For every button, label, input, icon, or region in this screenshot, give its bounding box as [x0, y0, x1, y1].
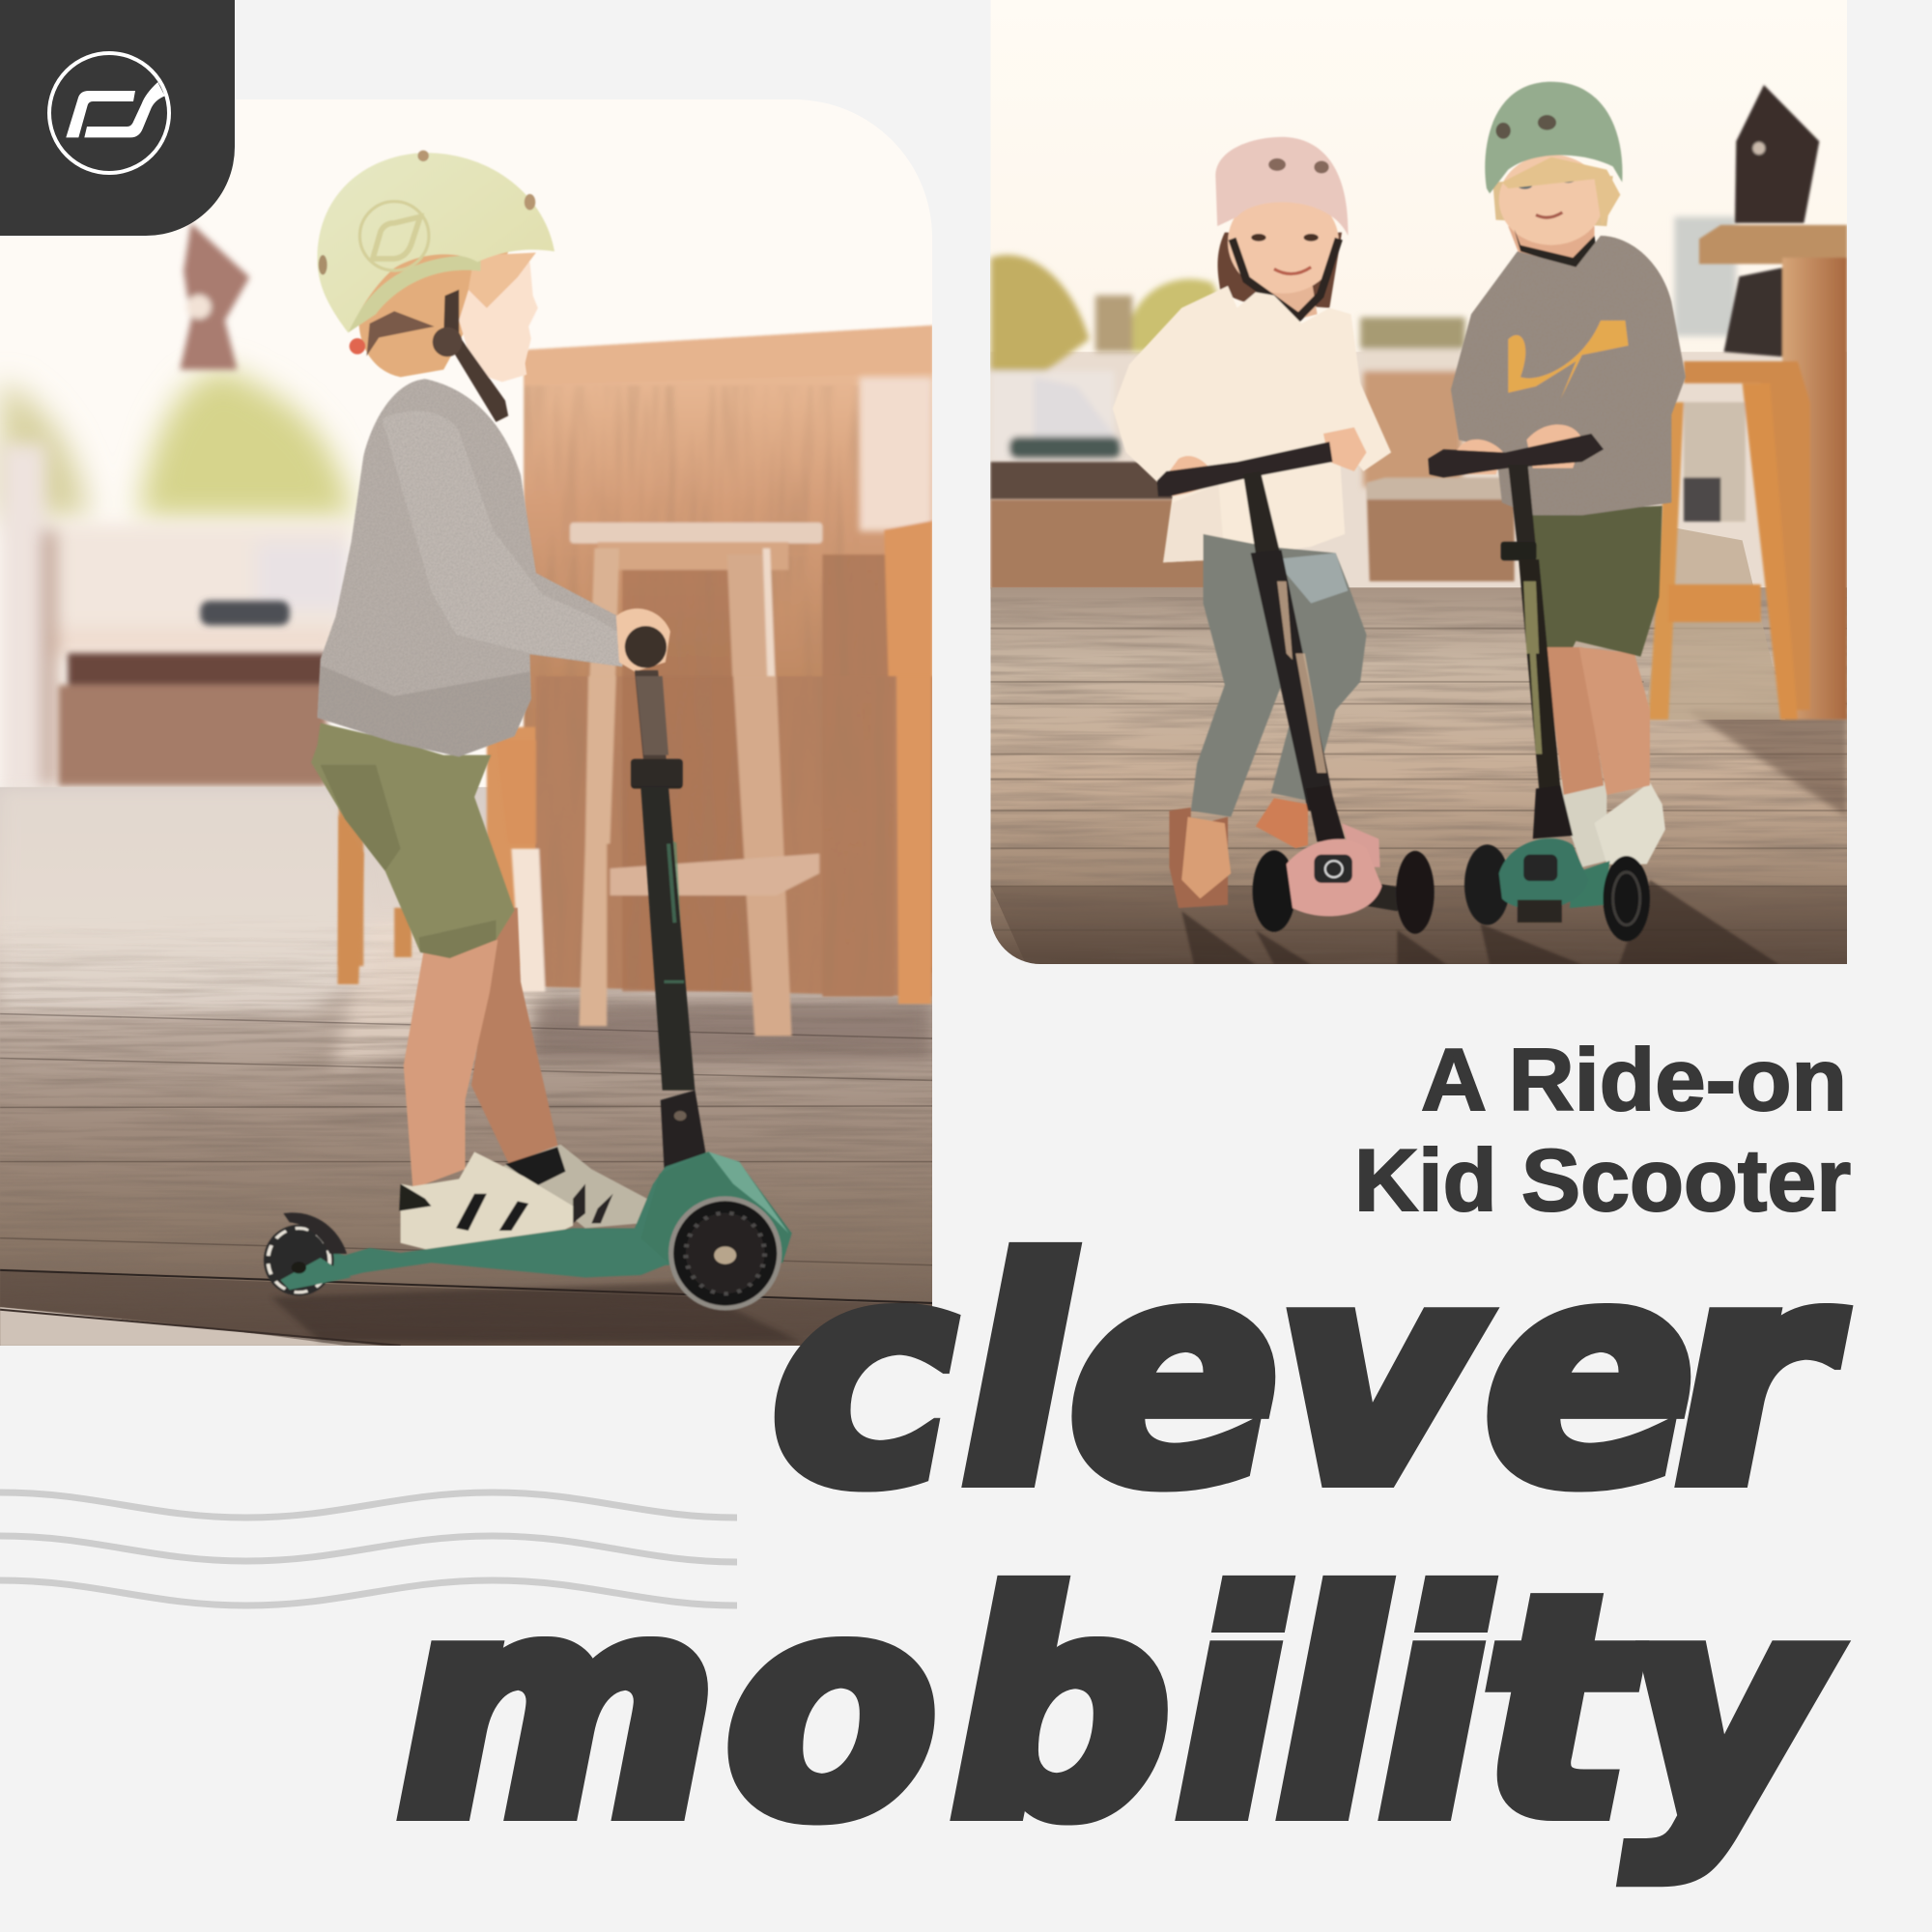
headline	[398, 1198, 1843, 1887]
subtitle: Kid Scooter	[1354, 1132, 1851, 1230]
subtitle: A Ride-on	[1421, 1032, 1847, 1129]
subtitle	[1354, 1032, 1851, 1230]
headline: mobility	[398, 1531, 1836, 1887]
boy figure and scooter	[264, 151, 792, 1311]
headline: clever	[773, 1198, 1843, 1553]
photo: boy riding scooter in profile	[0, 99, 933, 1349]
icon: brand roundel	[49, 53, 169, 173]
photo: girl and boy standing with scooters	[991, 0, 1847, 968]
logo badge	[0, 0, 235, 236]
girl and boy figures with scooters	[1113, 82, 1686, 941]
wavy lines	[0, 1492, 737, 1605]
